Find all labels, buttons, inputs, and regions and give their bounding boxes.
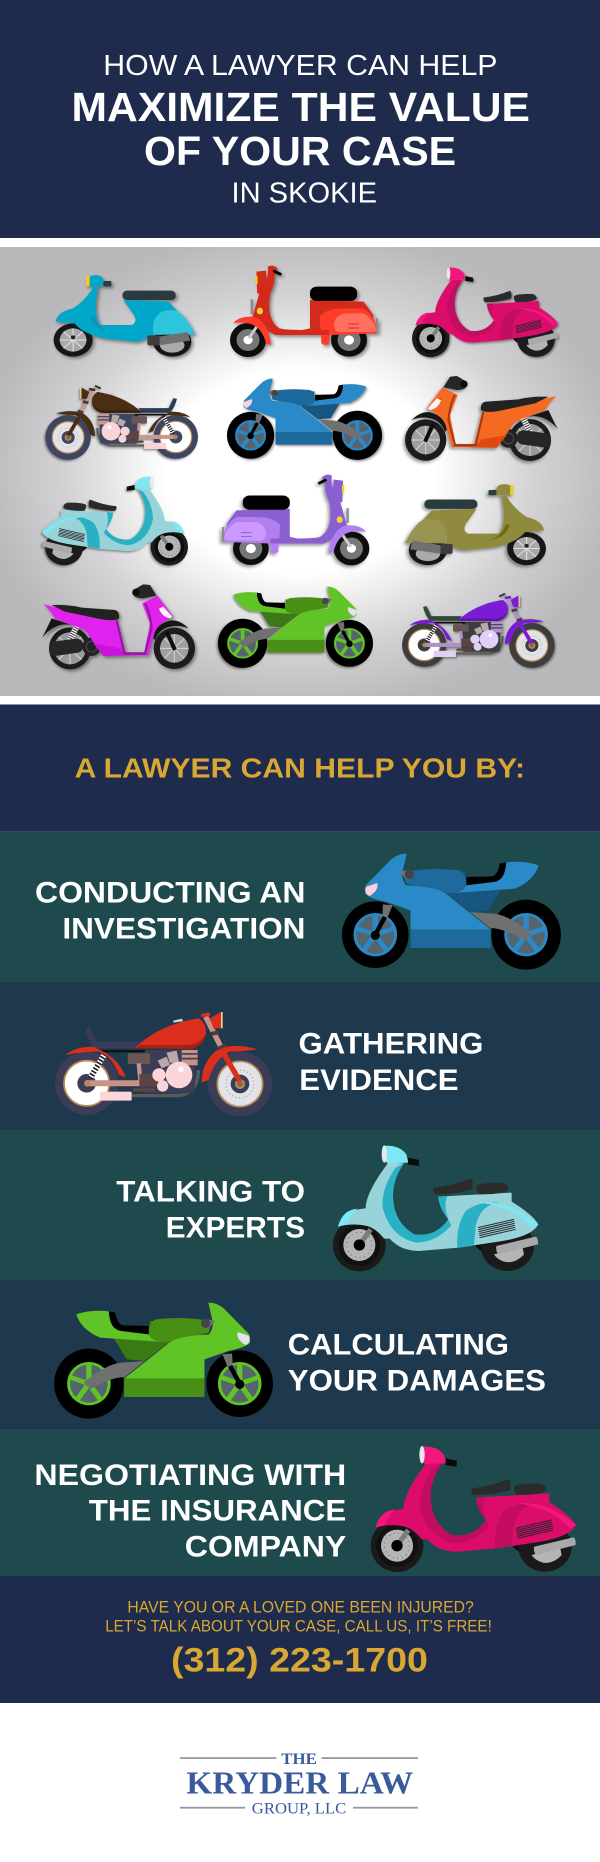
logo: The Kryder Law Group: KRYDER LAW (186, 1764, 413, 1800)
step heading: COMPANY (185, 1531, 346, 1564)
title line 1: HOW A LAWYER CAN HELP (103, 50, 498, 82)
step heading: THE INSURANCE (89, 1495, 346, 1528)
icon: light teal scooter (42, 476, 188, 565)
logo: The Kryder Law Group (180, 1751, 418, 1817)
step heading: CALCULATING (288, 1328, 509, 1361)
icon: purple scooter (222, 475, 369, 565)
logo: The Kryder Law Group: GROUP, LLC (252, 1800, 346, 1817)
icon: orange step-through (405, 376, 558, 461)
panel: gathering evidence (0, 982, 600, 1130)
icon: pink scooter (412, 267, 558, 357)
step heading: INVESTIGATION (62, 913, 305, 946)
step heading: EXPERTS (166, 1211, 305, 1244)
icon: cyan scooter (54, 275, 195, 357)
icon: olive scooter (405, 484, 546, 565)
panel: negotiating with the insurance company (0, 1429, 600, 1576)
title line 2: MAXIMIZE THE VALUE (72, 84, 530, 130)
step heading: TALKING TO (116, 1176, 305, 1209)
icon: pink scooter (371, 1446, 576, 1572)
step heading: YOUR DAMAGES (288, 1365, 546, 1398)
phone number: (312) 223-1700 (171, 1642, 428, 1680)
icon: purple motorcycle (402, 594, 555, 668)
panel: talking to experts (0, 1130, 600, 1280)
icon: red motorcycle (55, 1009, 272, 1116)
subheading: A LAWYER CAN HELP YOU BY: (75, 753, 525, 784)
icon: magenta step-through (42, 584, 195, 669)
icon: teal scooter (333, 1145, 538, 1271)
icon: blue sport bike (342, 854, 561, 970)
panel: header (0, 0, 600, 238)
step heading: NEGOTIATING WITH (34, 1459, 346, 1492)
call to action line 1: HAVE YOU OR A LOVED ONE BEEN INJURED? (127, 1598, 474, 1617)
step heading: EVIDENCE (299, 1064, 458, 1097)
icon: red scooter (230, 266, 378, 357)
icon: green sport bike (54, 1303, 273, 1419)
icon: green sport bike (218, 586, 373, 668)
icon: blue sport bike (227, 378, 382, 460)
logo: The Kryder Law Group: THE (281, 1751, 317, 1768)
icon: brown motorcycle (45, 386, 198, 460)
panel: subheading band (0, 704, 600, 832)
panel: call to action (0, 1576, 600, 1703)
title line 3: OF YOUR CASE (144, 128, 456, 174)
step heading: CONDUCTING AN (35, 877, 305, 910)
call to action line 2: LET’S TALK ABOUT YOUR CASE, CALL US, IT’S FREE! (105, 1616, 492, 1635)
panel: conducting an investigation (0, 832, 600, 982)
step heading: GATHERING (298, 1028, 483, 1060)
panel: motorcycle grid (0, 247, 600, 696)
panel: calculating your damages (0, 1280, 600, 1429)
title line 4: IN SKOKIE (232, 178, 377, 210)
